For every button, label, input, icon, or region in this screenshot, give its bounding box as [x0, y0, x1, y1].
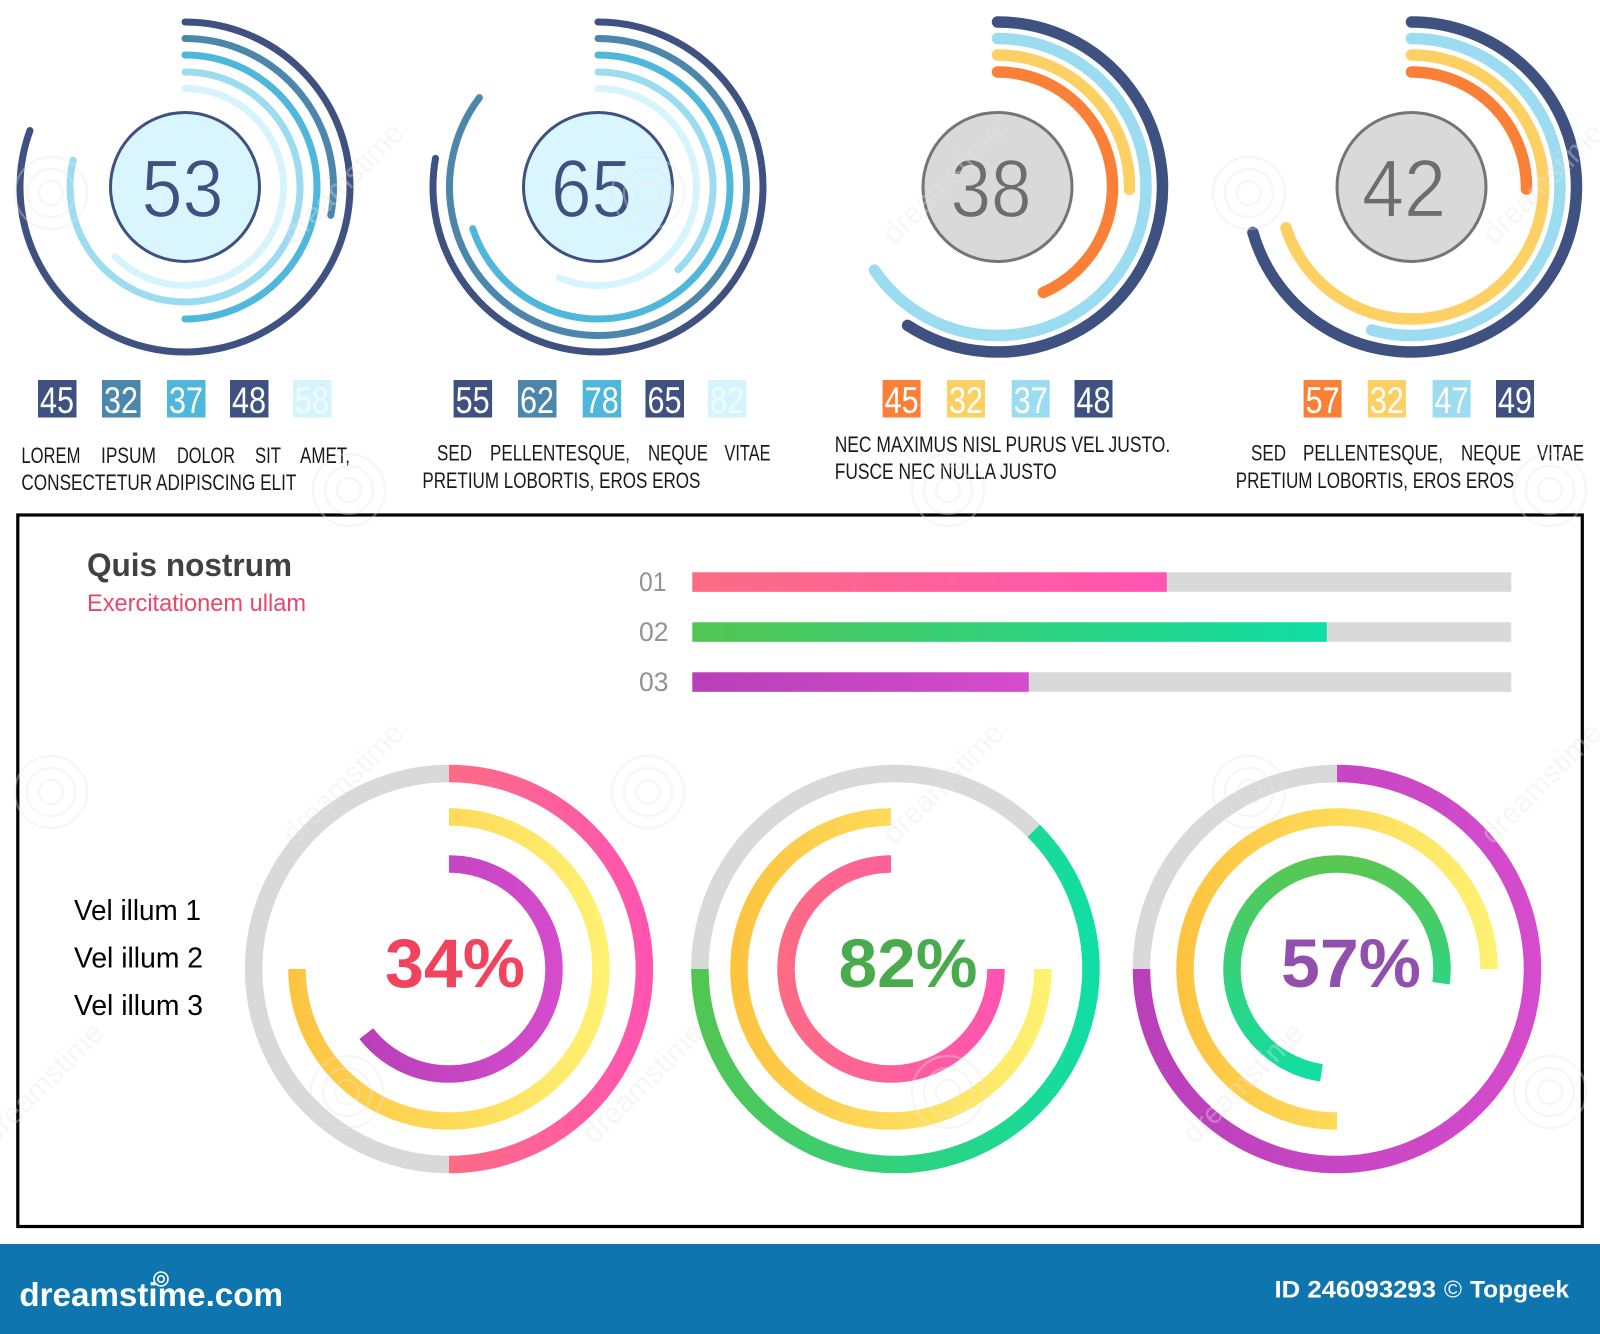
watermarks: dreamstime [576, 1016, 710, 1150]
legend labels [74, 895, 203, 1022]
arc 47 [1372, 38, 1560, 336]
caption 4 [1236, 441, 1584, 493]
legend 57: 57 [1306, 380, 1340, 421]
caption 4: SED [1251, 441, 1286, 466]
radial chart 2: value 65 [433, 22, 763, 352]
radial chart 1 legend [38, 380, 332, 421]
radial chart 4 legend [1304, 380, 1534, 421]
center number: 38 [950, 144, 1032, 234]
donut chart 82% [700, 773, 1091, 1164]
legend 37: 37 [169, 380, 203, 421]
legend 65: 65 [648, 380, 682, 421]
center number: 65 [551, 144, 632, 234]
legend labels: Vel illum 2 [74, 943, 203, 975]
legend 45: 45 [885, 380, 919, 421]
footer logo: dreamstime.com [19, 1276, 283, 1313]
legend 62: 62 [520, 380, 554, 421]
percentage: 57% [1281, 925, 1421, 1002]
legend labels: Vel illum 3 [74, 990, 203, 1022]
legend 78: 78 [585, 380, 619, 421]
legend 55: 55 [456, 380, 490, 421]
legend 82: 82 [710, 380, 744, 421]
legend 37: 37 [1014, 380, 1048, 421]
outer grey track [1142, 774, 1337, 969]
caption 1: SIT [255, 443, 281, 468]
legend 32: 32 [104, 380, 138, 421]
arc 37 [185, 55, 317, 319]
caption 1: CONSECTETUR ADIPISCING ELIT [21, 470, 296, 495]
footer image id and credit: © [1444, 1276, 1462, 1304]
outer grey track [254, 774, 449, 1164]
legend 32: 32 [949, 380, 983, 421]
center circle [110, 112, 260, 262]
arc 45 [998, 72, 1113, 292]
caption 3: FUSCE NEC NULLA JUSTO [835, 459, 1057, 484]
inner pink arc [786, 864, 996, 1074]
inner purple arc [366, 864, 554, 1074]
arc 78 [473, 55, 730, 319]
center number: 53 [142, 144, 224, 234]
watermarks [0, 116, 1600, 1150]
inner green arc [1232, 864, 1442, 1073]
percentage: 82% [838, 925, 978, 1002]
watermarks: dreamstime [1176, 1016, 1310, 1150]
center circle [524, 112, 672, 262]
radial chart 3: value 38 [874, 22, 1162, 352]
outer pink arc [449, 774, 644, 1164]
caption 1: IPSUM [101, 443, 156, 468]
bar chart [639, 567, 1511, 697]
arc 58 [115, 88, 284, 286]
subheading: Exercitationem ullam: Exercitationem ullam [87, 590, 306, 617]
arc 62 [449, 38, 746, 335]
caption 4: PRETIUM LOBORTIS, EROS EROS [1236, 468, 1514, 493]
bar 01 [639, 567, 1511, 597]
bar 03 [639, 667, 1511, 697]
legend 48: 48 [232, 380, 266, 421]
caption 1: DOLOR [177, 443, 235, 468]
arc 82 [560, 88, 696, 286]
legend 47: 47 [1435, 380, 1469, 421]
radial chart 3 legend [883, 380, 1112, 421]
donut chart 57% [1142, 774, 1532, 1164]
outer green arc [700, 831, 1091, 1164]
outer grey track [700, 773, 1034, 969]
caption 2: VITAE [724, 441, 770, 466]
legend 58: 58 [295, 380, 329, 421]
caption 1: AMET, [300, 443, 350, 468]
arc 49 [1253, 22, 1577, 352]
arc 37 [874, 38, 1146, 336]
watermarks: dreamstime [876, 116, 1010, 250]
radial chart 1: value 53 [20, 22, 350, 352]
bar 02: 02 [639, 617, 668, 647]
footer image id and credit [1274, 1276, 1570, 1304]
bar 03: 03 [639, 667, 668, 697]
watermarks: dreamstime [276, 116, 410, 250]
radial chart 2 legend [454, 380, 746, 421]
arc 48 [70, 72, 300, 302]
arc 57 [1412, 72, 1526, 189]
arc 32 [998, 55, 1129, 189]
legend 45: 45 [40, 380, 74, 421]
watermarks: dreamstime [876, 716, 1010, 850]
center circle [923, 112, 1072, 262]
legend 48: 48 [1076, 380, 1110, 421]
arc 32 [1286, 55, 1544, 319]
caption 2: PRETIUM LOBORTIS, EROS EROS [422, 468, 700, 493]
heading: Quis nostrum: Quis nostrum [87, 547, 292, 583]
bar 01: 01 [639, 567, 666, 597]
caption 1: LOREM [21, 443, 80, 468]
legend 49: 49 [1498, 380, 1532, 421]
caption 2: SED [437, 441, 472, 466]
center circle [1337, 112, 1486, 262]
percentage: 34% [385, 925, 525, 1002]
legend 32: 32 [1370, 380, 1404, 421]
footer banner [0, 1244, 1600, 1334]
caption 1 [21, 443, 350, 495]
caption 2: NEQUE [648, 441, 708, 466]
legend labels: Vel illum 1 [74, 895, 201, 927]
radial chart 4: value 42 [1253, 22, 1577, 352]
middle yellow arc [1185, 817, 1489, 1121]
center number: 42 [1362, 144, 1446, 234]
caption 4: VITAE [1537, 441, 1584, 466]
caption 4: NEQUE [1461, 441, 1521, 466]
donut chart 34% [254, 774, 644, 1164]
panel: lower framed box [18, 515, 1582, 1226]
caption 3: NEC MAXIMUS NISL PURUS VEL JUSTO. [835, 432, 1170, 457]
watermarks: dreamstime [276, 716, 410, 850]
middle yellow arc [739, 817, 1043, 1121]
outer purple arc [1142, 774, 1532, 1164]
caption 4: PELLENTESQUE, [1303, 441, 1443, 466]
footer image id and credit: ID 246093293 [1274, 1276, 1436, 1304]
arc 45 [20, 22, 350, 352]
icon: spiral [154, 1272, 168, 1286]
middle yellow arc [297, 817, 601, 1121]
arc 65 [598, 72, 713, 270]
bar 02 [639, 617, 1511, 647]
caption 3 [835, 432, 1170, 484]
arc 32 [185, 38, 333, 215]
caption 2 [422, 441, 770, 493]
arc 48 [908, 22, 1162, 352]
footer image id and credit: Topgeek [1470, 1276, 1570, 1304]
caption 2: PELLENTESQUE, [490, 441, 630, 466]
arc 55 [433, 22, 763, 352]
